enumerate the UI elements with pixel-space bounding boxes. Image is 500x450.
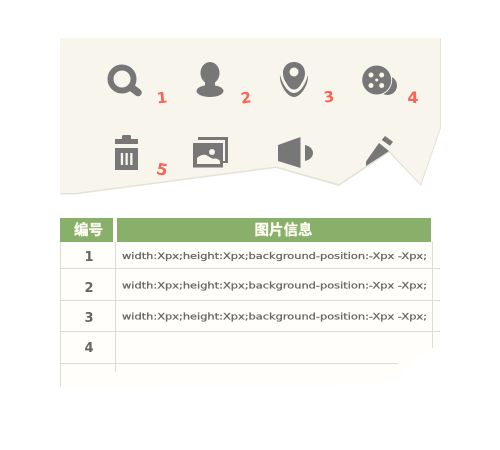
table grid <box>60 242 440 386</box>
icon: speaker <box>278 137 313 168</box>
sprite panel <box>60 38 441 194</box>
number 4: 4 <box>407 88 419 107</box>
icon: trash can <box>115 135 138 170</box>
row 3: width:Xpx;height:Xpx;background-position:-Xpx -Xpx; <box>122 312 427 322</box>
row 1: 1 <box>84 250 94 265</box>
number 2: 2 <box>240 88 252 108</box>
row 2 <box>84 281 427 296</box>
icon: search <box>110 68 138 92</box>
number 5: 5 <box>155 159 170 180</box>
table header <box>60 218 431 242</box>
row 4: 4 <box>84 341 94 356</box>
row 3 <box>84 311 427 326</box>
header: image info: 图片信息 <box>254 221 312 239</box>
icon: images <box>193 137 228 168</box>
table background <box>60 242 440 388</box>
icon: pencil <box>366 136 393 166</box>
icon: user <box>196 62 224 97</box>
number 3: 3 <box>323 87 335 107</box>
row 1: width:Xpx;height:Xpx;background-position:-Xpx -Xpx; <box>122 252 427 262</box>
row 3: 3 <box>84 311 94 326</box>
header: id: 编号 <box>74 221 103 239</box>
icon: film reel <box>361 64 397 96</box>
row 2: 2 <box>84 281 94 296</box>
row 1 <box>84 250 427 265</box>
row 2: width:Xpx;height:Xpx;background-position:-Xpx -Xpx; <box>122 282 427 292</box>
number 1: 1 <box>156 89 168 107</box>
icon: map pin <box>280 62 308 97</box>
